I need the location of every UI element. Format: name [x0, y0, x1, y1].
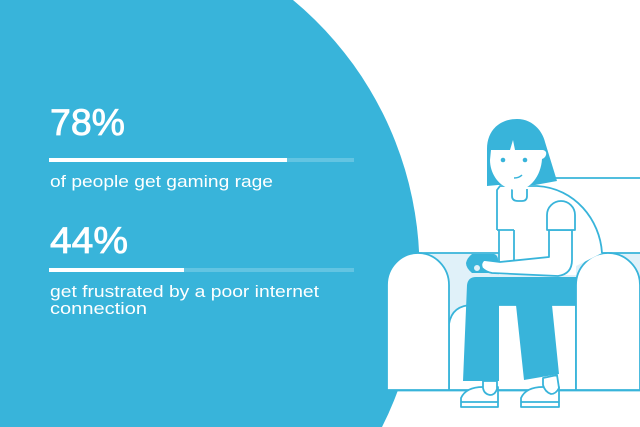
stat: 78 percent [49, 102, 354, 191]
caption 44 [50, 282, 319, 318]
torso [497, 186, 602, 275]
forearm [481, 230, 572, 276]
background circle panel [0, 0, 420, 427]
left shoe [461, 387, 498, 407]
back cushion [419, 253, 640, 328]
right armrest [576, 253, 640, 390]
caption 78: of people get gaming rage [50, 172, 273, 191]
floor line [387, 390, 640, 392]
smile [514, 175, 522, 178]
left arm [499, 230, 514, 262]
right sleeve [547, 201, 575, 230]
face [490, 140, 546, 190]
game controller [466, 254, 498, 273]
left sleeve [497, 229, 514, 231]
caption 44: get frustrated by a poor internet [50, 282, 319, 301]
trousers [463, 277, 576, 381]
left armrest [387, 253, 449, 390]
right eye [523, 158, 527, 162]
stat: 44 percent [49, 220, 354, 318]
torso outline [497, 186, 602, 253]
right sock [543, 375, 559, 394]
illustration: woman on sofa [387, 119, 640, 407]
right shoe [521, 387, 559, 407]
caption 44: connection [50, 299, 147, 318]
left eye [501, 158, 505, 162]
progress bar 44 [49, 268, 354, 272]
44% figure: 44% [50, 220, 128, 261]
torso fill [497, 186, 602, 275]
seat [449, 305, 576, 390]
hair [487, 119, 557, 186]
progress bar 78 [49, 158, 354, 162]
left sock [483, 381, 497, 395]
sofa [387, 178, 640, 390]
sofa back [535, 177, 640, 179]
collar [512, 189, 527, 201]
78% figure: 78% [50, 102, 125, 143]
